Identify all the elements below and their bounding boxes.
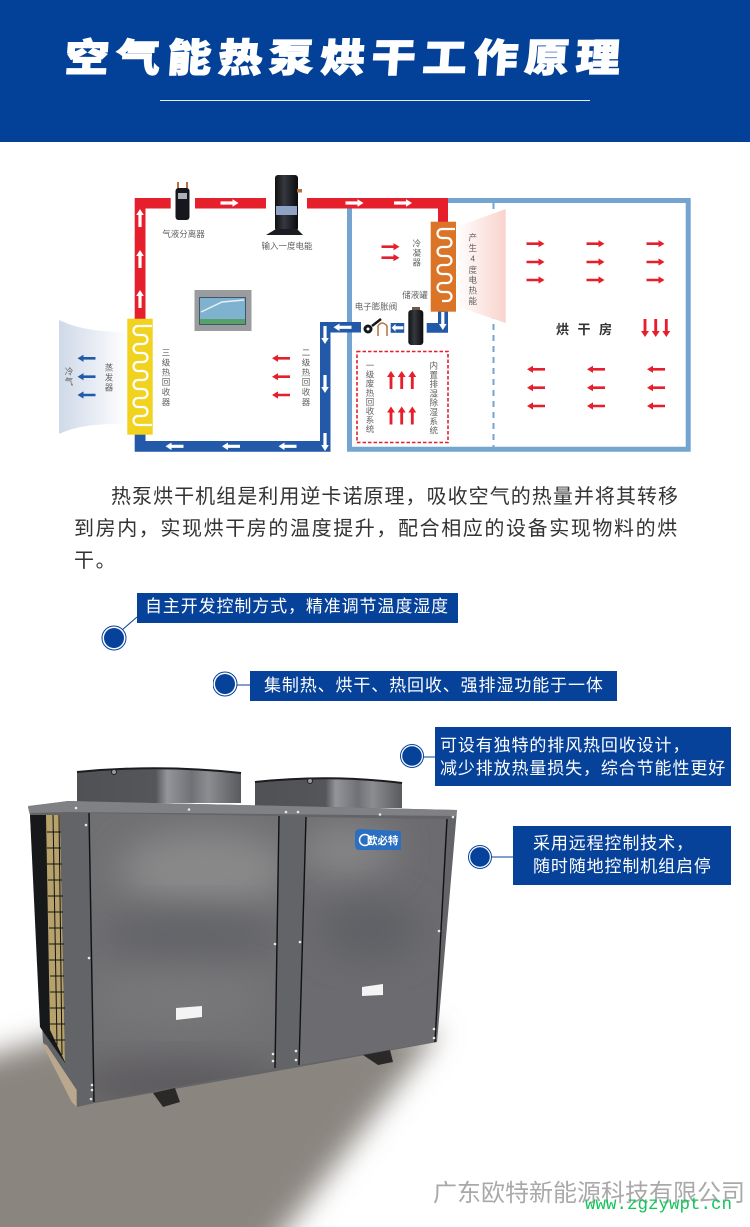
brand logo: 欧必特 (367, 834, 399, 847)
wood pallet edge (42, 1043, 77, 1107)
white flow arrows (136, 199, 447, 451)
labels: recovery units and evaporator: 产生4度电热能 (468, 232, 478, 307)
heat output stream (456, 209, 506, 323)
feet (153, 1050, 393, 1107)
touch control screen (194, 290, 252, 331)
callout 2: 集制热、烘干、热回收、强排湿功能于一体 (264, 676, 604, 695)
built-in dehumidifying system: 一级废热回收系统 (365, 361, 375, 434)
front left panel (90, 813, 278, 1063)
compressor (266, 175, 303, 235)
panel seams (89, 813, 447, 1102)
working principle diagram (59, 175, 691, 452)
fans (77, 768, 402, 808)
callout 2 (213, 671, 617, 701)
blue cold refrigerant pipe (135, 311, 448, 452)
side condenser coil (30, 815, 65, 1063)
callout 3 (400, 727, 731, 786)
labels: recovery units and evaporator: 冷凝器 (412, 238, 422, 268)
gas-liquid separator (176, 182, 190, 220)
labels: recovery units and evaporator (64, 232, 478, 407)
expansion valve (364, 319, 387, 336)
top rail (28, 801, 457, 816)
company name: 广东欧特新能源科技有限公司 (433, 1180, 745, 1207)
labels: recovery units and evaporator: 二级热回收器 (301, 348, 311, 407)
built-in dehumidifying system: 内置排湿除湿系统 (429, 360, 439, 436)
callout 3: 可设有独特的排风热回收设计， (440, 736, 690, 755)
labels: recovery units and evaporator: 蒸发器 (104, 362, 114, 393)
description paragraph: 到房内，实现烘干房的温度提升，配合相应的设备实现物料的烘 (74, 518, 679, 540)
header band (0, 0, 750, 142)
heat pump unit with floor shadow (0, 767, 457, 1227)
description paragraph (74, 486, 679, 572)
callout 1 (102, 593, 458, 650)
title: 空气能热泵烘干工作原理 (64, 37, 629, 80)
description paragraph: 热泵烘干机组是利用逆卡诺原理，吸收空气的热量并将其转移 (111, 486, 679, 508)
built-in dehumidifying system (357, 352, 448, 442)
description paragraph: 干。 (74, 550, 117, 572)
callout 4 (468, 826, 731, 885)
white nameplates (176, 984, 383, 1020)
red and blue air arrows, left loop (78, 243, 400, 399)
label: compressor: 输入一度电能 (261, 241, 313, 251)
labels: recovery units and evaporator: 三级热回收器 (161, 348, 171, 407)
callout 4: 采用远程控制技术， (533, 834, 694, 853)
label: expansion valve: 电子膨胀阀 (355, 302, 397, 312)
floor shadow (0, 1030, 440, 1227)
callout 3: 减少排放热量损失，综合节能性更好 (440, 758, 726, 778)
label: drying room: 烘干房 (556, 322, 621, 337)
evaporator (127, 319, 153, 435)
drying room air arrows (526, 240, 670, 410)
liquid receiver (408, 307, 423, 345)
cold air stream (59, 320, 128, 434)
red hot refrigerant pipe (135, 198, 448, 319)
front right panel (295, 812, 450, 1067)
rivets (75, 807, 454, 1100)
label: receiver: 储液罐 (402, 290, 428, 300)
brand logo (355, 829, 401, 850)
cabinet frame (28, 801, 457, 1107)
label: separator: 气液分离器 (162, 229, 205, 239)
labels: recovery units and evaporator: 冷气 (64, 366, 74, 387)
drying room outline (350, 200, 688, 449)
callout 1: 自主开发控制方式，精准调节温度湿度 (145, 597, 449, 616)
condenser (431, 222, 456, 312)
watermark: www.zgzywpt.cn (585, 1195, 732, 1215)
callout 4: 随时随地控制机组启停 (533, 856, 712, 876)
